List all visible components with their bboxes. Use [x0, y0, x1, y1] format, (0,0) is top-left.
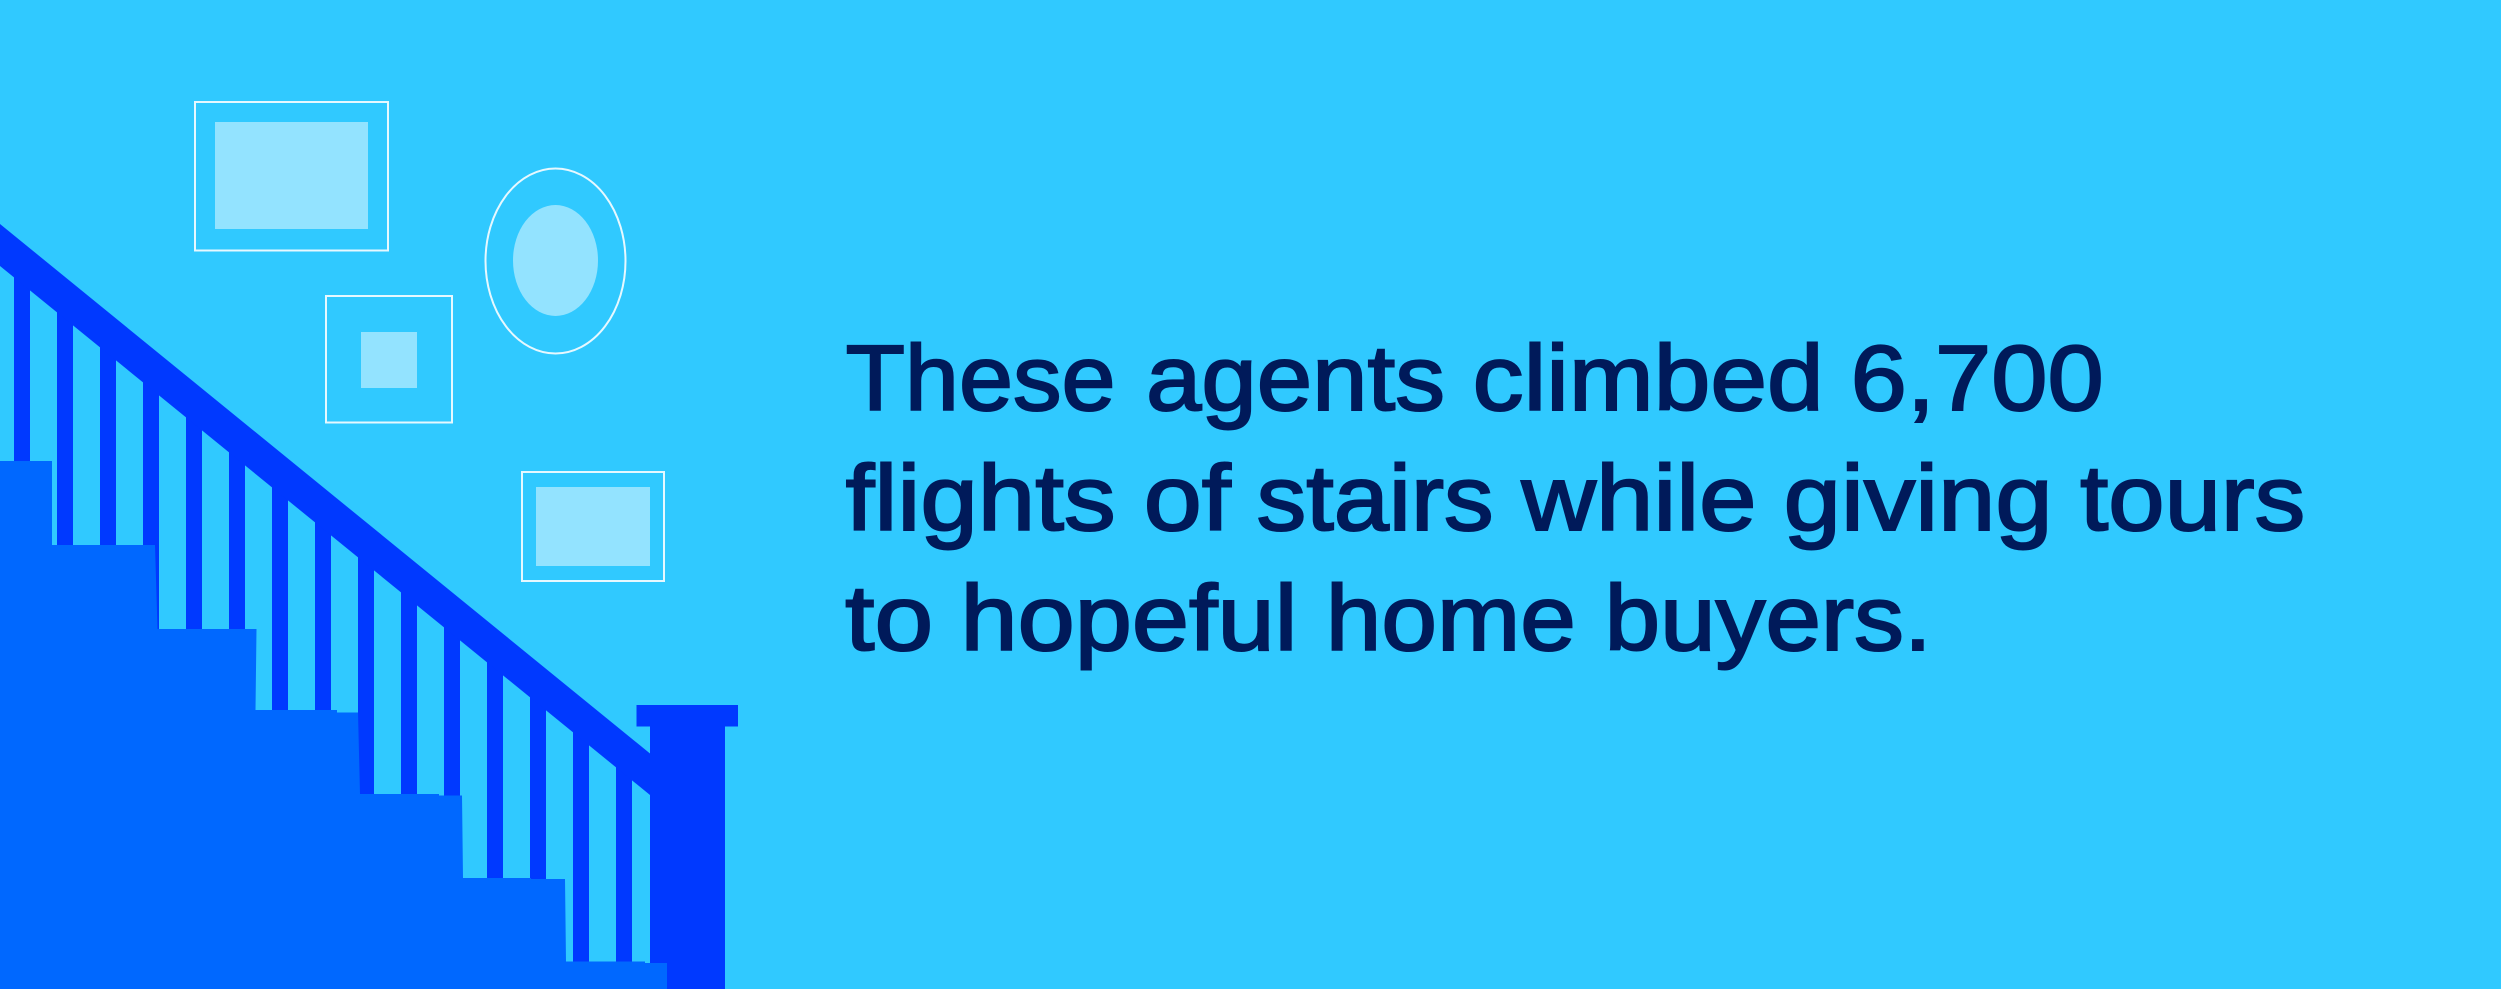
staircase balusters [14, 258, 632, 989]
statement text: home [1326, 566, 1576, 670]
statement text: climbed [1473, 326, 1824, 430]
statement text: These [846, 326, 1116, 430]
picture frame: small square [326, 296, 452, 422]
newel post [636, 705, 738, 989]
picture frame: lower rectangle [522, 472, 664, 581]
stair steps [0, 461, 667, 989]
statement text: buyers. [1605, 566, 1932, 670]
staircase handrail [0, 224, 650, 795]
statement text: 6,700 [1851, 326, 2104, 430]
statement text: agents [1146, 326, 1445, 430]
statement text: flights [846, 446, 1116, 550]
picture frame: large rectangle [195, 102, 388, 250]
statement text: while [1520, 446, 1756, 550]
picture frame: oval [486, 168, 626, 354]
statement text: of [1144, 446, 1231, 550]
statement text: hopeful [960, 566, 1298, 670]
statement text: to [845, 566, 933, 670]
statement text: tours [2080, 446, 2305, 550]
statement text [845, 326, 2305, 670]
statement text: giving [1784, 446, 2053, 550]
statement text: stairs [1257, 446, 1494, 550]
